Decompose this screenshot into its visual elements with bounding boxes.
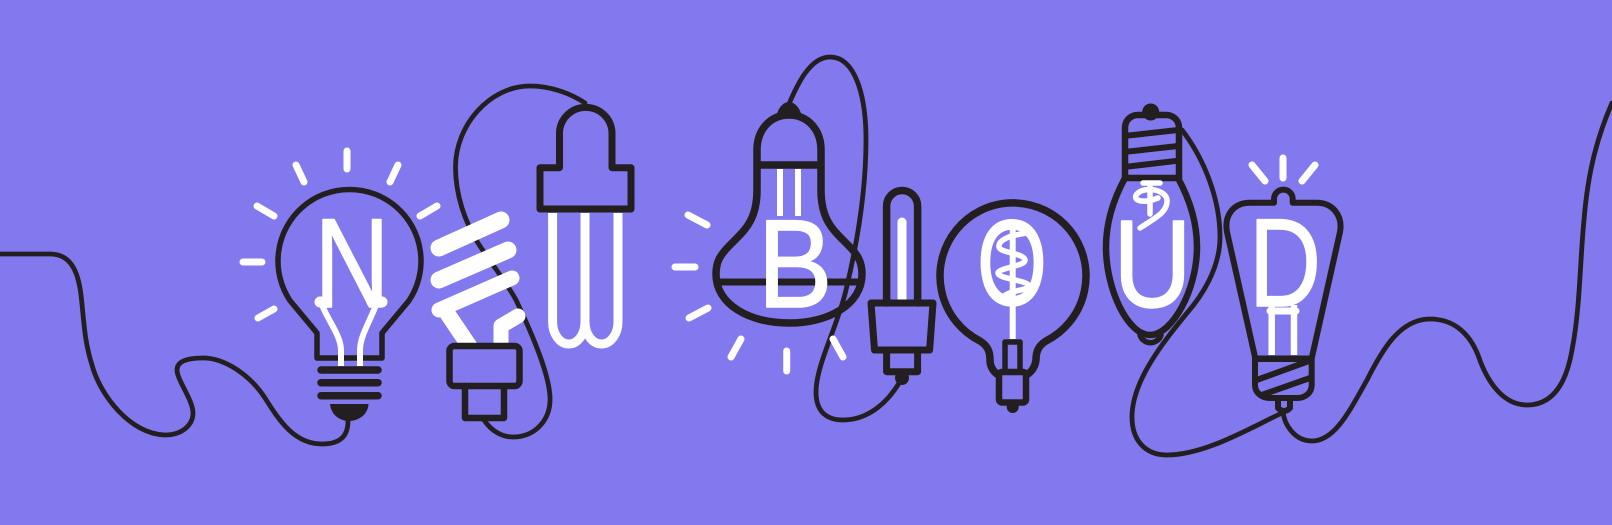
spiral tube bbox=[439, 220, 508, 280]
spiral base collar bbox=[450, 346, 520, 386]
N rays bbox=[243, 151, 437, 318]
bulb: twin tube lamp bbox=[540, 107, 631, 344]
bulb: letter D bbox=[1226, 158, 1341, 411]
globe base bbox=[999, 372, 1026, 402]
B letter: B bbox=[757, 195, 833, 334]
cord: U bulb to D bulb bbox=[1132, 130, 1282, 455]
cord: spiral bulb to twin tube bulb bbox=[456, 86, 585, 437]
tube tip bbox=[895, 371, 909, 385]
D rays bbox=[1252, 158, 1315, 181]
cord: B bulb to tube bulb bbox=[789, 57, 902, 420]
N tip bbox=[330, 404, 368, 421]
D collar line bbox=[1253, 355, 1313, 362]
tall cap bbox=[1125, 115, 1179, 178]
tube core bbox=[898, 222, 906, 300]
spiral right stem bbox=[501, 316, 518, 350]
bulb: letter N bbox=[243, 151, 437, 421]
D letter: D bbox=[1249, 193, 1321, 333]
globe stem bbox=[1005, 342, 1020, 372]
D base bbox=[1255, 358, 1312, 398]
cord: D bulb to right edge bbox=[1283, 103, 1612, 441]
tall knob bbox=[1142, 104, 1159, 120]
spiral stems bbox=[447, 313, 472, 350]
twin tube cap bbox=[540, 107, 631, 209]
D glass bbox=[1226, 190, 1341, 357]
U letter: U bbox=[1113, 194, 1192, 334]
D neck bbox=[1278, 398, 1290, 411]
B reflector line bbox=[720, 278, 858, 286]
N screw thread bbox=[321, 370, 378, 396]
tall stripes bbox=[1127, 130, 1178, 167]
D filament joint bbox=[1270, 308, 1296, 314]
globe spiral bbox=[998, 233, 1029, 300]
B glass bbox=[716, 115, 862, 323]
globe tip bbox=[1007, 401, 1019, 413]
globe glass bbox=[940, 203, 1086, 376]
tube foot bbox=[887, 350, 918, 372]
N letter: N bbox=[314, 192, 390, 334]
tall filament bbox=[1136, 183, 1167, 228]
tall glass bbox=[1106, 178, 1197, 335]
D filaments bbox=[1272, 305, 1294, 355]
twin tube glass bbox=[553, 213, 618, 344]
B rays bbox=[675, 215, 843, 371]
spiral base foot bbox=[465, 386, 504, 418]
N filaments bbox=[321, 302, 377, 366]
O letter: O bbox=[977, 195, 1047, 331]
tube glass bbox=[887, 190, 918, 303]
bulb: letter B bbox=[675, 102, 862, 371]
tube cap top bbox=[898, 218, 906, 226]
tube base bbox=[871, 303, 933, 350]
bulb: slim tube lamp bbox=[871, 190, 933, 385]
globe post bbox=[1010, 226, 1016, 339]
B knob bbox=[776, 102, 802, 117]
D base stripes bbox=[1257, 360, 1312, 395]
bulb: letter O tall lamp bbox=[1106, 104, 1197, 343]
bulb: spiral lamp bbox=[439, 220, 520, 418]
B divider bbox=[757, 161, 821, 169]
spiral lower tube bbox=[439, 278, 512, 310]
tall nub bbox=[1140, 335, 1161, 343]
N glass bbox=[278, 189, 421, 358]
cord: left to N bulb bbox=[0, 254, 348, 444]
N filament joints bbox=[320, 296, 382, 308]
bulb: letter O globe bbox=[940, 195, 1086, 413]
B filaments bbox=[780, 169, 798, 216]
